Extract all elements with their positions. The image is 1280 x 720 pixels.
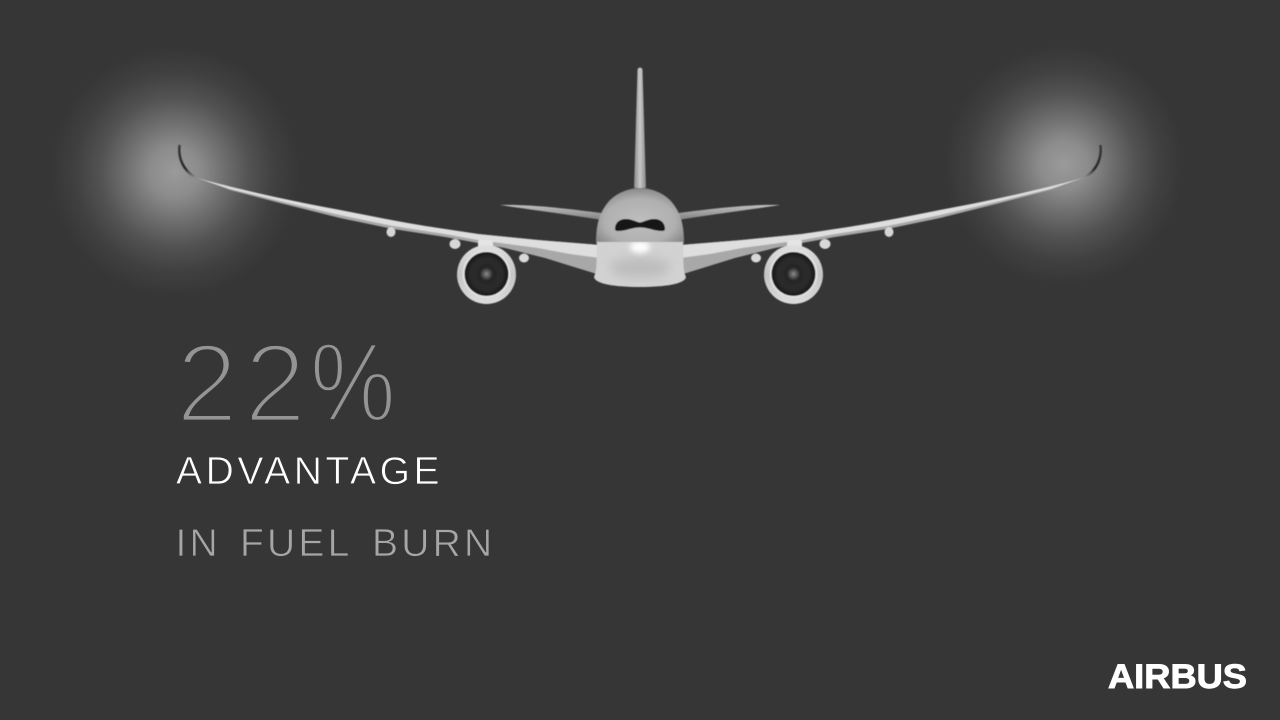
subheading: IN FUEL BURN: IN xyxy=(176,522,221,565)
fuselage xyxy=(594,188,686,287)
left wing and engine xyxy=(179,145,602,304)
cockpit windshield xyxy=(615,219,665,231)
tail fin xyxy=(634,68,646,188)
airplane front view xyxy=(179,68,1101,304)
subheading: IN FUEL BURN: FUEL xyxy=(240,522,352,565)
left wingtip glow xyxy=(50,47,300,297)
stat: 22% xyxy=(176,320,396,446)
infographic canvas xyxy=(70,64,1246,689)
heading: ADVANTAGE: ADVANTAGE xyxy=(176,450,443,493)
right wingtip glow xyxy=(944,45,1184,285)
right wing and engine xyxy=(678,145,1101,304)
stat: 22%: 22 xyxy=(176,321,306,446)
logo: AIRBUS: AIRBUS xyxy=(1108,658,1247,696)
stat: 22%: % xyxy=(310,320,396,446)
subheading: IN FUEL BURN: BURN xyxy=(372,522,495,565)
